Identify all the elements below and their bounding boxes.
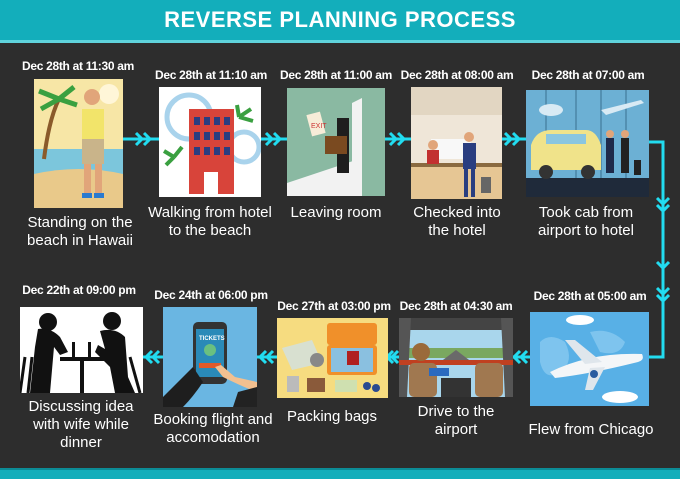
- text: airport: [435, 421, 477, 438]
- text: with wife while: [33, 416, 129, 433]
- text: Packing bags: [287, 408, 377, 425]
- step 2: hotel: [148, 68, 272, 239]
- image: hotel reception: [411, 87, 502, 199]
- text: Dec 28th at 04:30 am: [400, 299, 512, 313]
- text: Dec 24th at 06:00 pm: [154, 288, 268, 302]
- title bar: [0, 0, 680, 43]
- step 6: flight: [528, 289, 654, 438]
- text: Dec 28th at 08:00 am: [401, 68, 513, 82]
- text: Flew from Chicago: [528, 421, 654, 438]
- text: Dec 28th at 11:10 am: [155, 68, 267, 82]
- text: to the beach: [169, 222, 251, 239]
- bottom strip: [0, 468, 680, 479]
- text: Checked into: [413, 204, 501, 221]
- arrow: 9-10: [143, 351, 163, 363]
- arrow: 7-8: [387, 351, 399, 363]
- step 1: beach: [22, 59, 134, 249]
- text: Walking from hotel: [148, 204, 272, 221]
- arrow: 3-4: [385, 133, 411, 145]
- text: the hotel: [428, 222, 486, 239]
- image: taxi at airport: [526, 90, 649, 197]
- step 5: cab: [526, 68, 649, 239]
- arrow: 1-2: [123, 133, 159, 145]
- text: dinner: [60, 434, 102, 451]
- title: REVERSE PLANNING PROCESS: [164, 7, 516, 32]
- text: Dec 28th at 11:00 am: [280, 68, 392, 82]
- image: exit door: [287, 88, 385, 196]
- text: airport to hotel: [538, 222, 634, 239]
- text: Dec 28th at 11:30 am: [22, 59, 134, 73]
- arrow: 6-7: [513, 351, 530, 363]
- image: airplane: [530, 312, 649, 406]
- step 9: booking: [153, 288, 273, 446]
- text: accomodation: [166, 429, 260, 446]
- arrow: 8-9: [257, 351, 277, 363]
- text: beach in Hawaii: [27, 232, 133, 249]
- text: Dec 28th at 05:00 am: [534, 289, 646, 303]
- arrow: 2-3: [261, 133, 287, 145]
- image: phone booking: [163, 307, 257, 407]
- image: phone booking: TICKETS: [199, 336, 225, 342]
- text: Leaving room: [291, 204, 381, 221]
- step 4: check-in: [401, 68, 513, 239]
- text: Booking flight and: [153, 411, 273, 428]
- arrow: 4-5: [502, 133, 526, 145]
- image: packing suitcase: [277, 318, 388, 398]
- image: driving car interior: [399, 318, 513, 397]
- text: Dec 22th at 09:00 pm: [22, 283, 136, 297]
- text: Drive to the: [418, 403, 494, 420]
- image: exit door: EXIT: [311, 123, 327, 130]
- image: beach: [34, 79, 123, 208]
- text: Standing on the: [27, 214, 133, 231]
- step 7: drive: [399, 299, 513, 438]
- text: Took cab from: [539, 204, 633, 221]
- image: dinner silhouette: [20, 307, 143, 393]
- text: Dec 28th at 07:00 am: [532, 68, 644, 82]
- step 3: leaving room: [280, 68, 392, 221]
- step 8: packing: [277, 299, 391, 425]
- text: Discussing idea: [28, 398, 134, 415]
- arrow: right connector: [649, 142, 669, 357]
- text: Dec 27th at 03:00 pm: [277, 299, 391, 313]
- step 10: dinner: [20, 283, 143, 451]
- image: hotel: [159, 87, 261, 197]
